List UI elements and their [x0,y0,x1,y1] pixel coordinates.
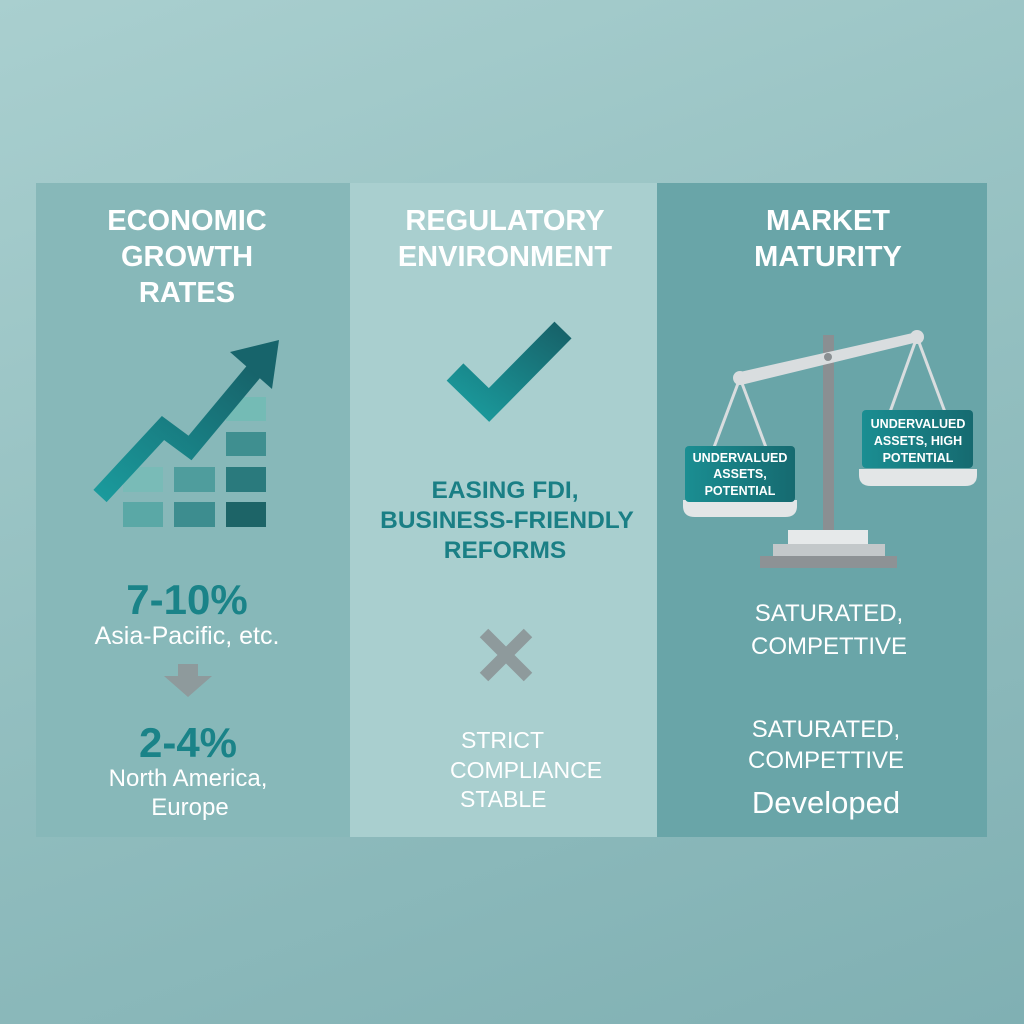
text: developed: Developed [752,785,900,820]
icon: cross [484,633,528,677]
stat: 7-10%: Asia-Pacific, etc. [95,622,279,650]
text: easing FDI [380,477,634,564]
text: easing FDI: EASING FDI, [431,477,579,504]
text: saturated competitive 2: SATURATED, [752,716,900,743]
text: saturated competitive 1: COMPETTIVE [751,633,907,660]
heading: market maturity: MARKET [766,205,890,237]
heading: regulatory environment: REGULATORY [405,205,605,237]
stat: 2-4%: North America, [109,765,267,792]
callout: left pan label: ASSETS, [713,467,767,481]
icon: down arrow [164,664,212,697]
heading: economic growth rates: RATES [139,277,235,309]
stat: 7-10% [95,576,279,650]
text: saturated competitive 2 [748,716,904,774]
callout: left pan label: UNDERVALUED [693,451,787,465]
panel: economic growth rates [36,183,350,837]
text: strict compliance: COMPLIANCE [450,757,602,783]
text: saturated competitive 2: COMPETTIVE [748,747,904,774]
icon: checkmark [455,330,563,405]
chart: growth bars with arrow [100,340,279,527]
icon: balance scale [683,330,977,568]
heading: market maturity: MATURITY [754,241,902,273]
text: saturated competitive 1 [751,600,907,660]
callout: right pan label: ASSETS, HIGH [874,434,962,448]
heading: economic growth rates: GROWTH [121,241,253,273]
heading: regulatory environment: ENVIRONMENT [398,241,612,273]
heading: economic growth rates [107,205,267,309]
stat: 2-4% [109,719,267,821]
heading: market maturity [754,205,902,273]
panel: market maturity [657,183,987,837]
stat: 2-4%: Europe [151,794,229,821]
callout: left pan label [685,446,795,502]
heading: economic growth rates: ECONOMIC [107,205,267,237]
text: saturated competitive 1: SATURATED, [755,600,903,627]
text: strict compliance [450,727,602,812]
panel: regulatory environment [350,183,657,837]
text: strict compliance: STABLE [460,786,546,812]
callout: right pan label [862,410,973,468]
heading: regulatory environment [398,205,612,273]
stat: 2-4%: 2-4% [139,719,237,766]
text: easing FDI: BUSINESS-FRIENDLY [380,507,634,534]
text: strict compliance: STRICT [461,727,544,753]
stat: 7-10%: 7-10% [126,576,248,623]
text: easing FDI: REFORMS [444,537,566,564]
callout: right pan label: POTENTIAL [883,451,954,465]
callout: left pan label: POTENTIAL [705,484,776,498]
callout: right pan label: UNDERVALUED [871,417,965,431]
